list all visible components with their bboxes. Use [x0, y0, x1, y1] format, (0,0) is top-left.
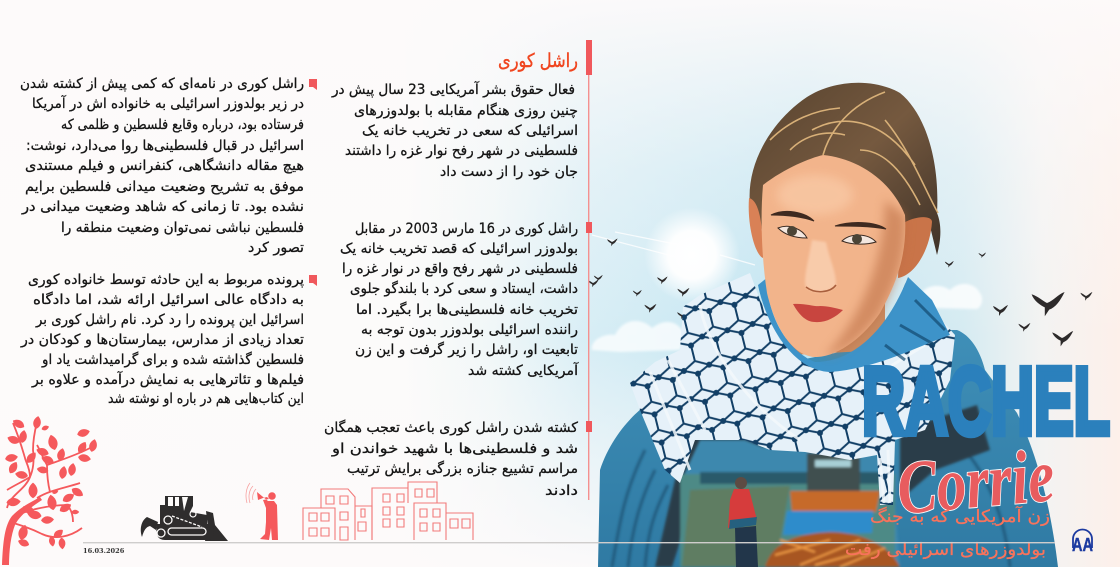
title: Corrie: Corrie — [894, 433, 1058, 531]
text block: legal case: پرونده مربوط به این حادثه توسط خانواده کوری — [28, 272, 304, 288]
text block: legal case: این کتاب‌هایی هم در باره او نوشته شد — [108, 391, 304, 407]
text block: letter: فرستاده بود، درباره وقایع فلسطین و ظلمی که — [61, 117, 304, 133]
text block: 16 March 2003: بولدوزر اسرائیلی که قصد تخریب خانه یک — [340, 241, 578, 257]
portrait of Rachel Corrie — [598, 83, 1058, 567]
text block: letter: تصور کرد — [248, 240, 304, 256]
text block: intro — [331, 81, 578, 180]
heading: راشل کوری — [498, 50, 578, 72]
text block: 16 March 2003: آمریکایی کشته شد — [468, 362, 579, 379]
bullet marker: letter — [309, 79, 317, 90]
text block: 16 March 2003: داشت، ایستاد و سعی کرد با بلندگو جلوی — [350, 280, 578, 297]
logo: AA — [1072, 530, 1093, 555]
text block: 16 March 2003: راشل کوری در 16 مارس 2003 در مقابل — [355, 221, 578, 237]
icon: person with megaphone — [246, 483, 278, 540]
face — [762, 155, 905, 357]
dark shadow under scarf — [655, 405, 990, 567]
sky: sun and clouds — [592, 207, 982, 352]
text block: 16 March 2003 — [340, 221, 579, 379]
text block: letter: موفق به تشریح وضعیت میدانی فلسطین برایم — [25, 179, 304, 195]
icon: tree — [2, 415, 98, 565]
text block: legal case: به دادگاه عالی اسرائیل ارائه شد، اما دادگاه — [33, 291, 304, 308]
text block: 16 March 2003: راننده اسرائیلی بولدوزر بدون توجه به — [361, 322, 578, 338]
text block: legal case — [20, 272, 304, 407]
hair highlights — [770, 92, 938, 213]
scarf pale stripes — [650, 305, 925, 503]
text block: reaction — [324, 419, 578, 499]
text block: 16 March 2003: تابعیت او، راشل را زیر گرفت و این زن — [355, 341, 578, 358]
logo: AA: AA — [1072, 535, 1093, 555]
right ear — [898, 217, 932, 278]
face shading — [825, 200, 905, 356]
text block: letter: فلسطین نباشی نمی‌توان وضعیت منطقه را — [61, 220, 304, 236]
inner scarf — [758, 277, 950, 372]
text block: reaction: مراسم تشییع جنازه بزرگی برایش ترتیب — [347, 460, 578, 477]
eyebrows — [771, 211, 886, 229]
text block: legal case: اسرائیل این پرونده را رد کرد. نام راشل کوری بر — [35, 312, 304, 328]
text block: intro: اسرائیلی که سعی در تخریب خانه یک — [362, 123, 578, 139]
icon: ruined buildings — [303, 482, 473, 540]
text block: letter: در زیر بولدوزر اسرائیلی به خانواده اش در آمریکا — [32, 95, 304, 112]
subtitle: زن آمریکایی که به جنگ — [870, 505, 1050, 527]
text block: legal case: تعداد زیادی از مدارس، بیمارستان‌ها و کودکان در — [20, 332, 304, 348]
left ear — [749, 198, 763, 258]
text block: intro: فعال حقوق بشر آمریکایی 23 سال پیش در — [331, 81, 575, 98]
text block: letter: نشده بود. تا زمانی که شاهد وضعیت میدانی در — [21, 199, 304, 215]
text block: letter: اسرائیل در قبال فلسطینی‌ها روا می‌دارد، نوشت: — [26, 138, 304, 154]
icon: bulldozer — [141, 496, 228, 541]
scarf — [630, 273, 955, 505]
text block: legal case: فلسطین گذاشته شده و برای گرامیداشت یاد او — [41, 351, 304, 368]
neck — [775, 280, 885, 355]
text block: 16 March 2003: تخریب خانه فلسطینی‌ها برا بگیرد. اما — [356, 301, 578, 318]
hair back — [750, 83, 940, 255]
text block: reaction: شد و فلسطینی‌ها با شهید خواندن او — [331, 441, 578, 457]
scene: field and bulldozer — [680, 440, 900, 567]
timeline rule with markers — [586, 40, 592, 500]
text block: letter: هیچ مقاله دانشگاهی، کنفرانس و فیلم مستندی — [25, 157, 304, 174]
person in red — [728, 477, 758, 567]
nose — [805, 240, 836, 292]
text block: intro: فلسطینی در شهر رفح نوار غزه را داشتند — [345, 143, 578, 159]
forehead and cheek light — [777, 175, 853, 215]
text block: letter — [20, 76, 304, 256]
eyes — [778, 226, 876, 244]
text block: intro: جان خود را از دست داد — [440, 164, 578, 180]
baseline rule — [83, 542, 1055, 543]
lips — [793, 304, 843, 322]
text block: 16 March 2003: فلسطینی در شهر رفح واقع در نوار غزه را — [342, 261, 578, 277]
text block: legal case: فیلم‌ها و تئاترهایی به نمایش درآمده و علاوه بر — [31, 371, 304, 388]
jacket — [598, 330, 1058, 567]
text block: letter: راشل کوری در نامه‌ای که کمی پیش از کشته شدن — [20, 76, 304, 92]
text block: intro: چنین روزی هنگام مقابله با بولدوزرهای — [354, 102, 578, 119]
date: 16.03.2026 — [83, 547, 125, 555]
flock of birds — [588, 238, 1092, 346]
subtitle — [845, 505, 1050, 560]
text block: reaction: دادند — [545, 483, 578, 499]
bullet marker: legal case — [309, 275, 317, 286]
subtitle: بولدوزرهای اسرائیلی رفت — [845, 540, 1046, 560]
text block: reaction: کشته شدن راشل کوری باعث تعجب همگان — [324, 419, 578, 436]
jacket folds — [612, 450, 1010, 567]
